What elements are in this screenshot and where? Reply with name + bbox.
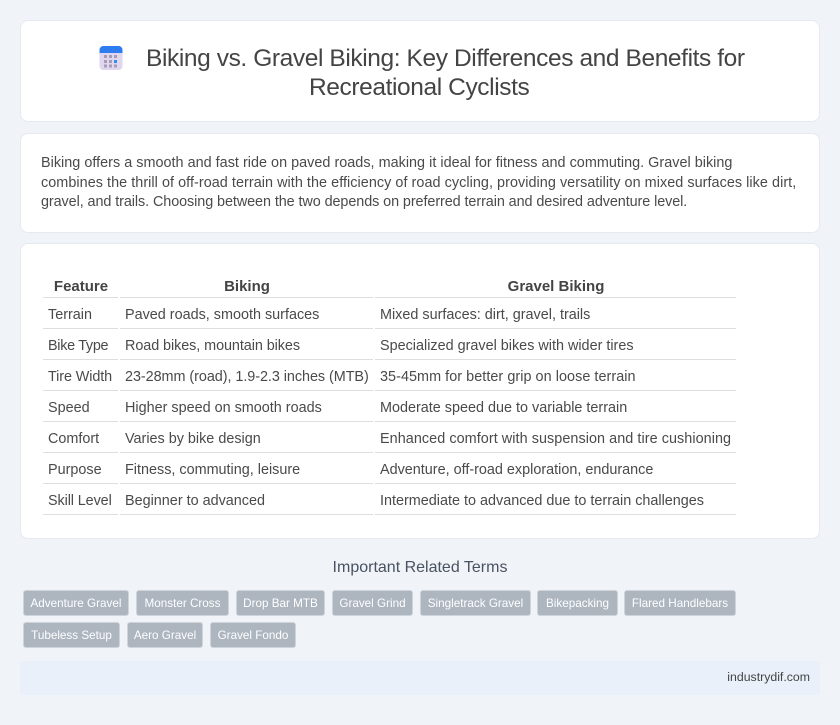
row: speed [48, 400, 627, 416]
row: purpose [48, 462, 653, 478]
row: comfort: Comfort [48, 431, 99, 447]
row: terrain: Terrain [48, 307, 92, 323]
row: bike type: Specialized gravel bikes with wider tires [380, 338, 634, 354]
row: purpose: Fitness, commuting, leisure [125, 462, 300, 478]
table header: Biking [224, 278, 270, 295]
text block: introduction: gravel, and trails. Choosing between the two depends on preferred terrain and desired adventure level. [41, 194, 687, 210]
tags: related terms: Gravel Fondo [218, 629, 288, 642]
row: skill level: Skill Level [48, 493, 112, 509]
panel: introduction [20, 133, 820, 233]
table header: Gravel Biking [508, 278, 604, 295]
panel: comparison table [20, 243, 820, 539]
title: Recreational Cyclists [309, 74, 529, 101]
title: Biking vs. Gravel Biking: Key Differences and Benefits for [146, 45, 745, 72]
row: skill level: Beginner to advanced [125, 493, 265, 509]
row: terrain: Mixed surfaces: dirt, gravel, trails [380, 307, 590, 323]
text block: introduction: Biking offers a smooth and fast ride on paved roads, making it ideal for fitness and commuting. Gravel biking [41, 155, 732, 171]
row: comfort [48, 431, 731, 447]
row: speed: Speed [48, 400, 90, 416]
row: speed: Higher speed on smooth roads [125, 400, 322, 416]
row: tire width: Tire Width [48, 369, 112, 385]
tags: related terms: Drop Bar MTB [243, 597, 318, 610]
row: purpose: Adventure, off-road exploration, endurance [380, 462, 653, 478]
tags: related terms: Singletrack Gravel [428, 597, 523, 610]
tags: related terms: Gravel Grind [339, 597, 406, 610]
row: skill level: Intermediate to advanced due to terrain challenges [380, 493, 704, 509]
title [146, 45, 745, 101]
text block: introduction [41, 155, 796, 210]
row: purpose: Purpose [48, 462, 102, 478]
row: bike type [48, 338, 634, 354]
tags: related terms [23, 590, 736, 648]
panel: title header [20, 20, 820, 122]
footer bar [20, 661, 820, 695]
text block: introduction: combines the thrill of off-road terrain with the efficiency of road cycling, providing versatility on mixed surfaces like dirt, [41, 174, 796, 190]
tags: related terms: Adventure Gravel [31, 597, 121, 610]
row: bike type: Road bikes, mountain bikes [125, 338, 300, 354]
tags: related terms: Monster Cross [144, 597, 220, 610]
footer credit: industrydif.com [727, 670, 810, 684]
table header: Feature [54, 278, 108, 295]
tags: related terms: Flared Handlebars [632, 597, 728, 610]
table: comparison [43, 278, 736, 515]
row: comfort: Varies by bike design [125, 431, 261, 447]
row: bike type: Bike Type [48, 338, 108, 354]
row: tire width: 23-28mm (road), 1.9-2.3 inches (MTB) [125, 369, 369, 385]
row: terrain [48, 307, 590, 323]
tags: related terms: Bikepacking [546, 597, 609, 610]
row: terrain: Paved roads, smooth surfaces [125, 307, 319, 323]
tags: related terms: Tubeless Setup [31, 629, 112, 642]
icon: calendar [100, 46, 122, 70]
tags: related terms: Aero Gravel [134, 629, 196, 642]
row: comfort: Enhanced comfort with suspension and tire cushioning [380, 431, 731, 447]
row: speed: Moderate speed due to variable terrain [380, 400, 627, 416]
table header [54, 278, 604, 295]
row: skill level [48, 493, 704, 509]
row: tire width: 35-45mm for better grip on loose terrain [380, 369, 636, 385]
row: tire width [48, 369, 636, 385]
heading: related terms: Important Related Terms [333, 559, 507, 576]
